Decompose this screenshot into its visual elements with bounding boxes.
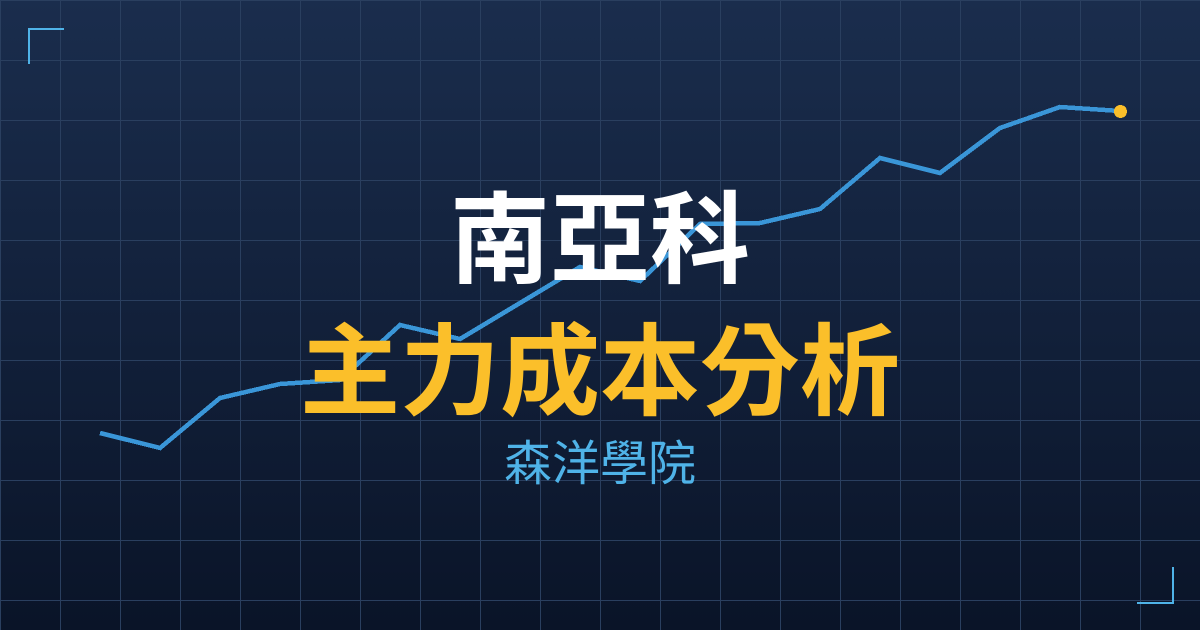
corner bracket: top left	[29, 29, 64, 64]
corner bracket: bottom right	[1137, 567, 1173, 603]
subtitle: academy name: 森洋學院	[504, 438, 696, 491]
title: company name: 南亞科	[450, 185, 750, 297]
heading: main cost analysis: 主力成本分析	[300, 317, 900, 429]
line chart	[100, 107, 1120, 448]
chart end point marker	[1114, 105, 1127, 118]
